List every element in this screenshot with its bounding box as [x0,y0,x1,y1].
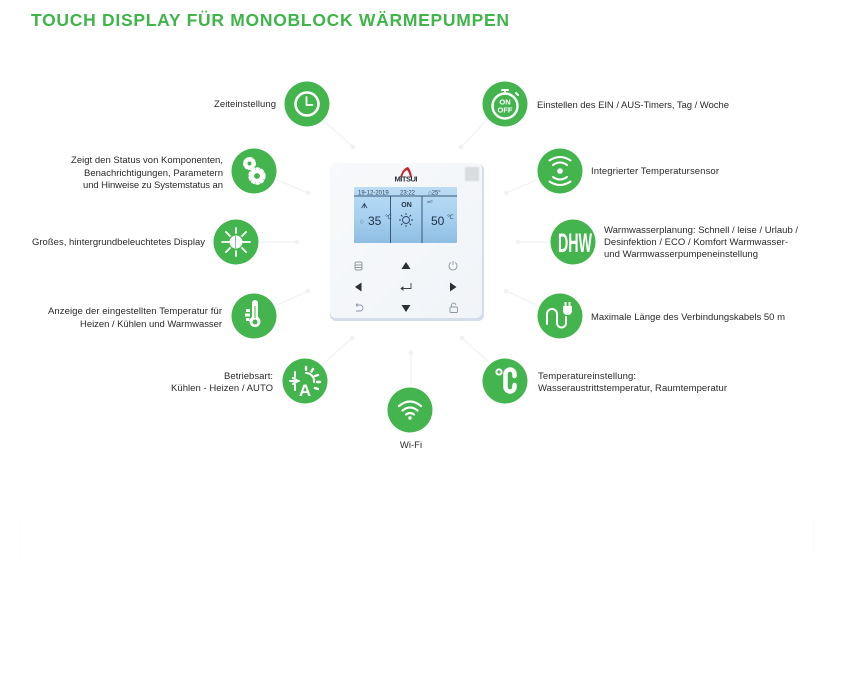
item: Temperatureinstellung [482,358,727,404]
LCD screen: ℃ [447,214,454,221]
item: Betriebsart [171,358,328,404]
icon: DHW [550,220,596,264]
icon: clock [284,82,330,126]
icon: degrees celsius [482,358,528,404]
item: Timer [482,82,729,126]
icon: sun display [214,220,258,264]
LCD screen: ℃ [385,214,392,221]
brand logo: MITSUI [394,174,418,184]
item: Temperatursensor [538,148,719,194]
icon: wifi [388,388,432,432]
icon: thermometer [232,294,276,338]
item: Status: Benachrichtigungen, Parametern [84,168,223,179]
item: Zeiteinstellung [214,82,330,126]
controller device [330,163,484,321]
icon: mode [282,358,328,404]
touch keys [355,261,458,312]
item: Betriebsart: Betriebsart: [224,371,273,382]
brand logo [394,167,418,184]
LCD screen: 23:22 [400,190,416,196]
item: Status [71,148,276,194]
icon: on off stopwatch [482,82,528,126]
icon: gears [232,148,276,194]
item: DHW [550,220,798,264]
item: Temperatureinstellung: Wasseraustrittstemperatur, Raumtemperatur [538,383,727,394]
item: Status: Zeigt den Status von Komponenten, [71,155,223,166]
icon: sensor [538,148,582,194]
icon: on off stopwatch: ON [499,98,511,106]
item: Anzeige Temperatur: Heizen / Kühlen und Warmwasser [80,319,222,330]
item: Wi-Fi [388,388,432,451]
icon: on off stopwatch: OFF [498,106,513,114]
item: DHW: Desinfektion / ECO / Komfort Warmwasser- [604,237,788,248]
item: Anzeige Temperatur: Anzeige der eingestellten Temperatur für [48,306,222,317]
LCD screen: ON [401,202,412,209]
item: DHW: und Warmwasserpumpeneinstellung [604,249,758,260]
item: Display: Großes, hintergrundbeleuchtetes Display [32,237,205,248]
LCD screen: ♢ [359,219,364,226]
item: Timer: Einstellen des EIN / AUS-Timers, Tag / Woche [537,100,729,111]
item: Temperatureinstellung: Temperatureinstellung: [538,371,636,382]
LCD screen: 50 [431,214,445,228]
LCD screen: ≈ᵒ [427,200,433,206]
LCD screen: 35 [368,214,382,228]
item: Wi-Fi: Wi-Fi [400,440,422,451]
sensor grille [465,167,479,181]
LCD screen: ᗑ [361,202,368,210]
icon: plug [538,294,582,338]
item: Status: und Hinweise zu Systemstatus an [83,180,223,191]
icon: DHW: DHW [558,228,592,258]
item: Kabel [538,294,785,338]
LCD screen: 19-12-2019 [358,190,389,196]
item: DHW: Warmwasserplanung: Schnell / leise / Urlaub / [604,225,798,236]
item: Anzeige Temperatur [48,294,276,338]
LCD screen: ⌂25° [428,190,441,196]
item: Display [32,220,258,264]
LCD screen [354,187,457,243]
item: Betriebsart: Kühlen - Heizen / AUTO [171,383,273,394]
icon: mode: A [299,381,311,400]
item: Temperatursensor: Integrierter Temperatursensor [591,166,719,177]
title: TOUCH DISPLAY FÜR MONOBLOCK WÄRMEPUMPEN [31,10,509,30]
item: Zeiteinstellung: Zeiteinstellung [214,99,276,110]
item: Kabel: Maximale Länge des Verbindungskabels 50 m [591,312,785,323]
